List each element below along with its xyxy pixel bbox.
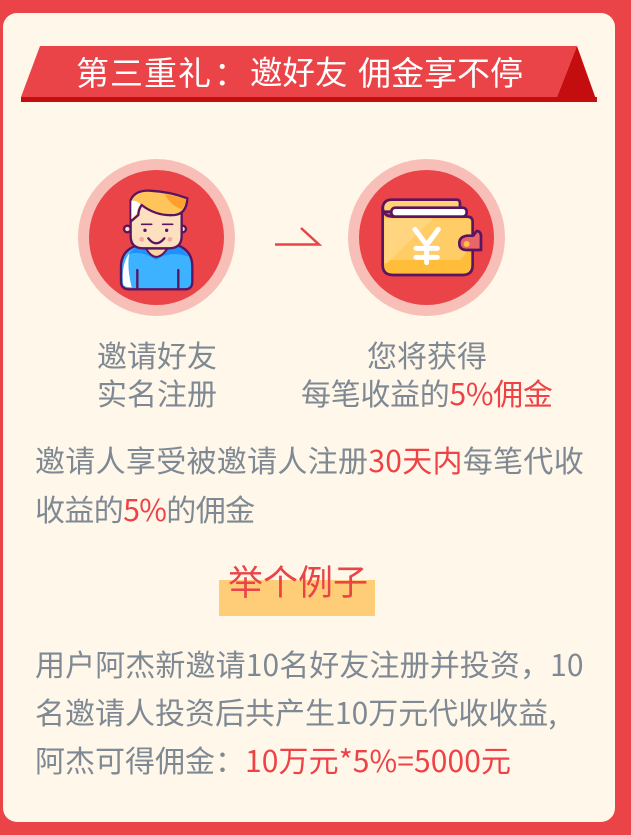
icon: person in circle: [78, 159, 235, 316]
arrow: [275, 227, 322, 246]
title: 邀好友: [250, 47, 348, 94]
label: invite friends: 邀请好友: [97, 332, 217, 376]
text block: rule: 邀请人享受被邀请人注册30天内每笔代收: [35, 437, 584, 481]
text block: example: 名邀请人投资后共产生10万元代收收益,: [35, 689, 557, 733]
label: invite friends: 实名注册: [97, 370, 217, 414]
label: you will receive: 您将获得: [367, 332, 487, 376]
text block: rule: 收益的5%的佣金: [35, 486, 254, 530]
heading: example: 举个例子: [228, 555, 368, 606]
text block: example: 阿杰可得佣金：10万元*5%=5000元: [35, 737, 511, 781]
heading highlight: [219, 580, 375, 616]
label: you will receive: [301, 332, 553, 414]
title: 第三重礼: [76, 47, 212, 95]
banner: title ribbon: [21, 46, 597, 102]
text block: rule: [35, 437, 584, 530]
title: 佣金享不停: [358, 47, 523, 95]
label: invite friends: [97, 332, 217, 414]
text block: example: [35, 641, 584, 781]
icon: wallet in circle: [348, 159, 505, 316]
label: you will receive: 每笔收益的5%佣金: [301, 370, 553, 414]
title: [76, 47, 523, 95]
text block: example: 用户阿杰新邀请10名好友注册并投资，10: [35, 641, 584, 685]
title: ：: [214, 47, 247, 95]
